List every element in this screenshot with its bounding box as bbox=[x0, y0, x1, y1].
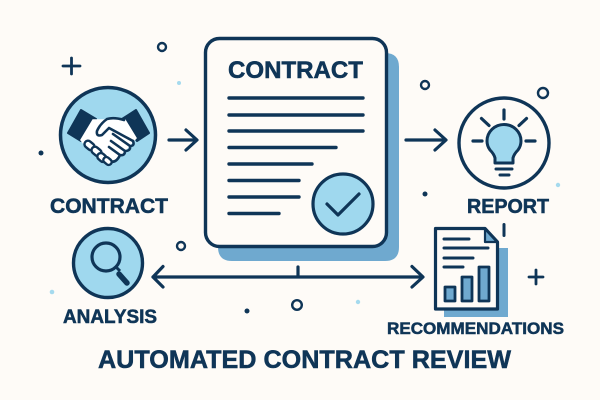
decorative plus top left bbox=[63, 58, 80, 74]
decorative dark dot bbox=[244, 308, 250, 314]
document heading: CONTRACT bbox=[228, 57, 363, 84]
decorative dark dot bbox=[422, 192, 428, 196]
decorative ring bbox=[421, 81, 429, 89]
tick above recommendations bbox=[502, 224, 506, 236]
label: contract left: CONTRACT bbox=[50, 195, 168, 218]
label: report: REPORT bbox=[467, 196, 549, 218]
decorative dark dot bbox=[38, 150, 44, 156]
icon: magnifier circle bbox=[74, 228, 142, 298]
document shadow bbox=[218, 53, 399, 261]
icon: report document with bars bbox=[436, 228, 508, 317]
label: analysis: ANALYSIS bbox=[63, 307, 157, 328]
arrow: document to report bbox=[406, 130, 446, 150]
document text lines bbox=[229, 98, 363, 214]
decorative light dot bbox=[50, 290, 54, 294]
icon: light bulb circle bbox=[459, 98, 549, 188]
decorative plus right bbox=[529, 270, 543, 284]
decorative light dot bbox=[556, 183, 560, 187]
decorative ring top bbox=[158, 43, 166, 51]
icon: check badge bbox=[313, 174, 373, 234]
decorative light dot bbox=[177, 81, 181, 85]
arrow: handshake to document bbox=[169, 130, 197, 150]
title: AUTOMATED CONTRACT REVIEW bbox=[98, 346, 511, 374]
decorative ring bbox=[177, 242, 185, 250]
decorative light dot bbox=[356, 300, 360, 304]
decorative ring bbox=[292, 300, 302, 310]
icon: handshake circle bbox=[60, 88, 156, 182]
label: recommendations: RECOMMENDATIONS bbox=[387, 319, 564, 338]
document page bbox=[206, 38, 386, 246]
arrow: two-way analysis to recommendations bbox=[153, 266, 423, 287]
decorative ring bbox=[538, 88, 548, 98]
panel: contract document bbox=[206, 38, 399, 261]
